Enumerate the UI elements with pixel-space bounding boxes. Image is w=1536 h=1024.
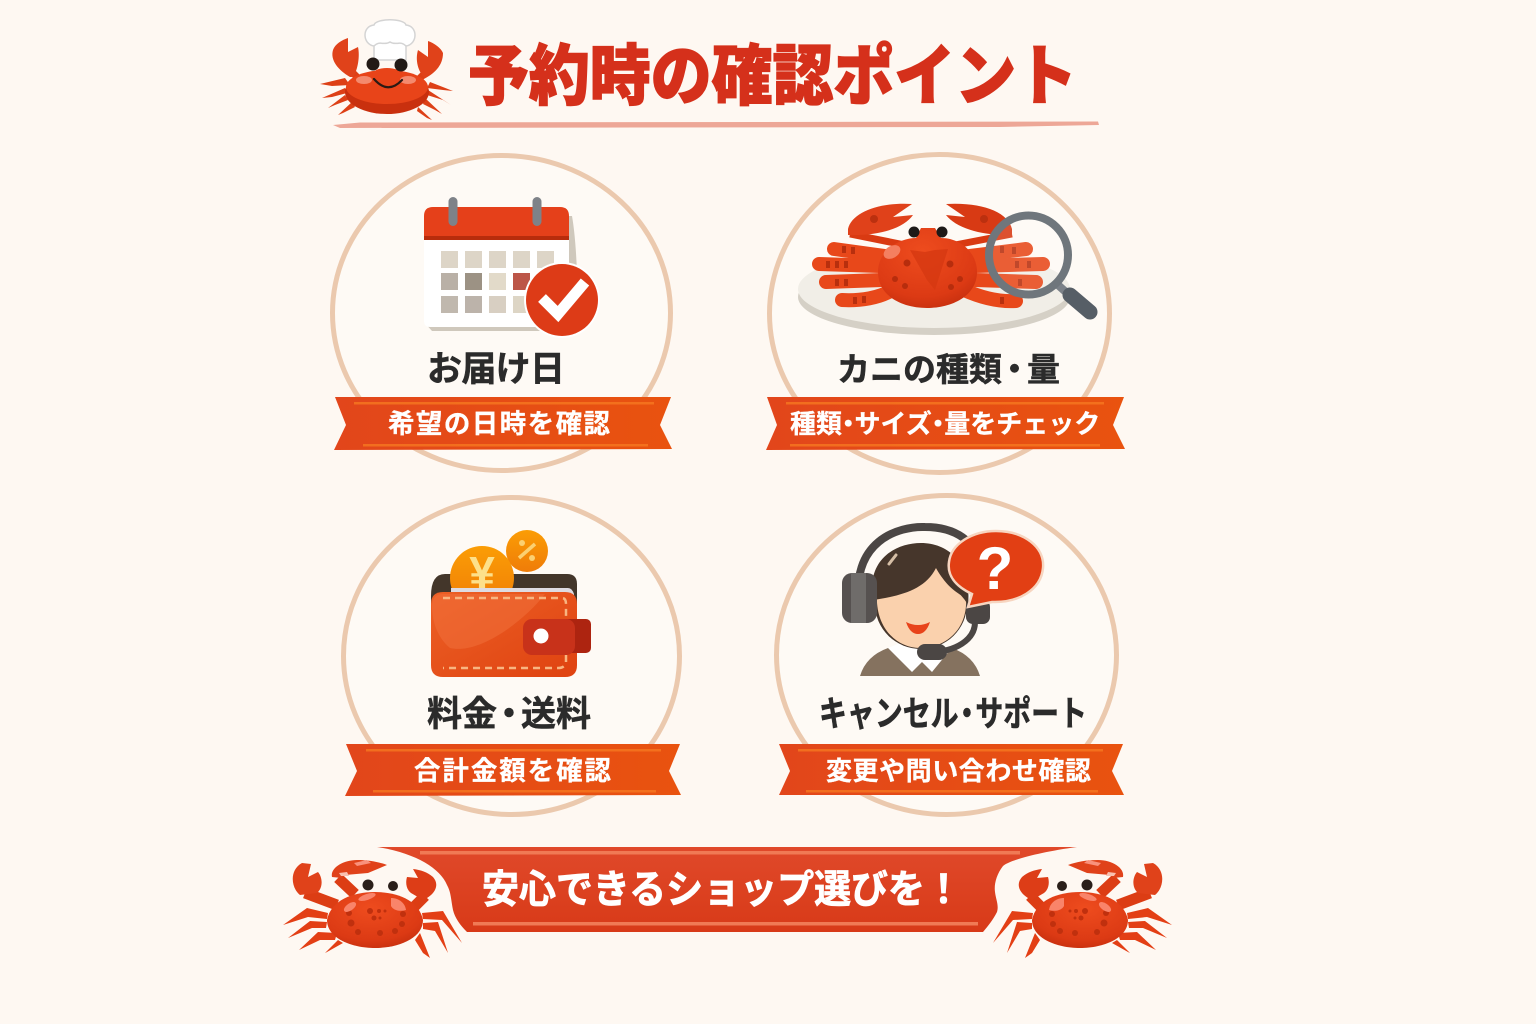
icon: yen coin: ¥ [469, 547, 495, 599]
panel ring [344, 498, 680, 814]
panel ring [332, 156, 670, 470]
ribbon: 種類・サイズ・量をチェック [790, 409, 1100, 439]
title underline [333, 122, 1099, 128]
heading: お届け日 [427, 350, 565, 389]
panel: price and shipping [344, 498, 681, 814]
icon: crab with chef hat [320, 20, 453, 120]
heading: キャンセル・サポート [819, 695, 1087, 734]
title: 予約時の確認ポイント [468, 39, 1077, 113]
ribbon [334, 397, 672, 450]
banner ribbon [377, 847, 1077, 932]
icon: yen coin [450, 546, 514, 610]
ribbon: 希望の日時を確認 [388, 409, 610, 439]
panel ring [770, 154, 1110, 472]
panel: cancellation and support [776, 496, 1124, 814]
icon: speech bubble: ? [977, 535, 1013, 602]
icon: percent coin [506, 530, 548, 572]
icon: calendar with check [424, 197, 600, 338]
panel ring [776, 496, 1116, 814]
closing banner [283, 847, 1172, 958]
heading: カニの種類・量 [837, 351, 1060, 388]
icon: right crab [993, 860, 1172, 958]
icon: wallet with coins [431, 530, 591, 677]
banner ribbon: 安心できるショップ選びを！ [482, 869, 962, 912]
ribbon [345, 744, 681, 796]
icon: left crab [283, 860, 462, 958]
icon: speech bubble [949, 531, 1043, 607]
header: crab mascot, title and underline [320, 20, 1099, 128]
ribbon: 合計金額を確認 [414, 756, 612, 786]
panel: delivery date [332, 156, 672, 470]
icon: crab on plate with magnifier [798, 204, 1090, 335]
heading: 料金・送料 [427, 695, 591, 734]
ribbon: 変更や問い合わせ確認 [826, 756, 1091, 786]
icon: support operator with question bubble [842, 527, 1043, 676]
ribbon [766, 397, 1125, 450]
panel: crab type and amount [766, 154, 1125, 472]
ribbon [779, 744, 1124, 795]
